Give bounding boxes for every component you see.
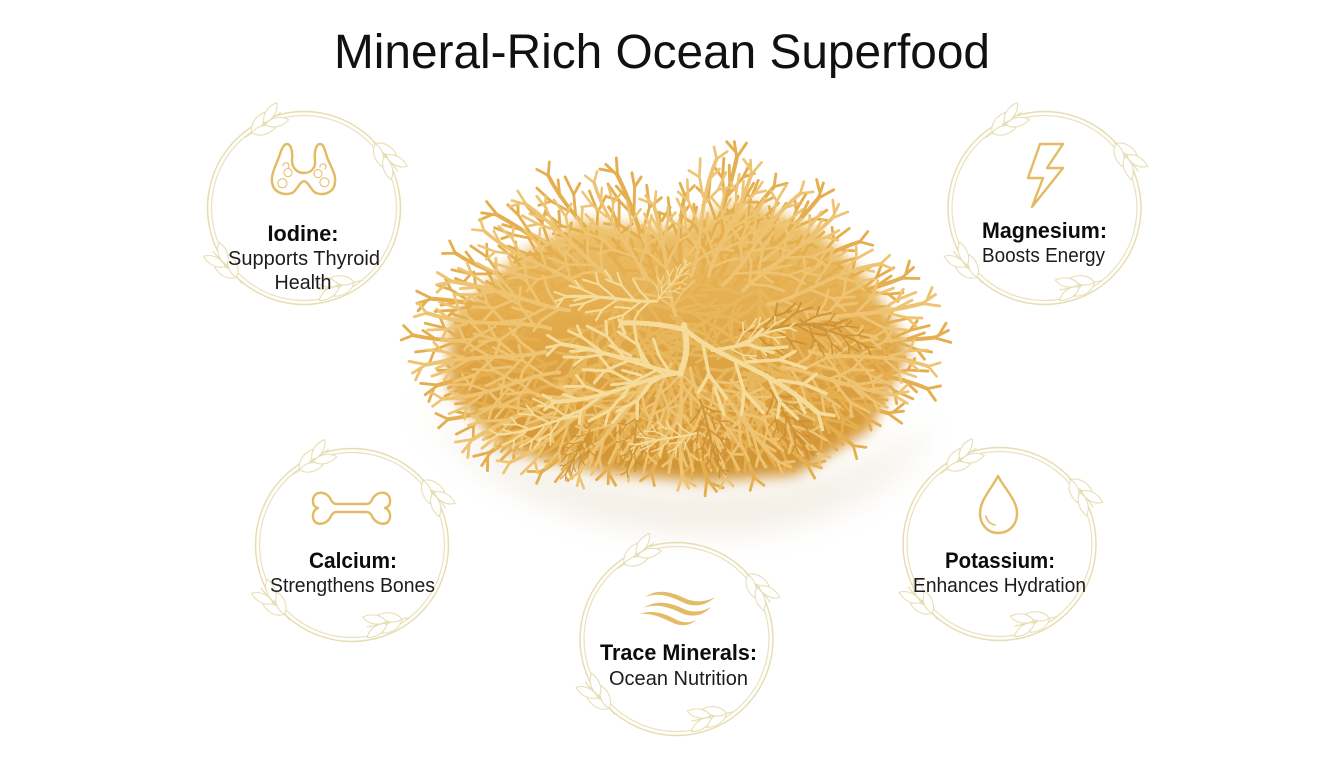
text: strengthens bones: Strengthens Bones: [270, 575, 435, 597]
panel: magnesium: [944, 102, 1148, 304]
icon: water drop: [980, 476, 1017, 533]
icon: thyroid: [272, 144, 335, 194]
wreath: [251, 439, 456, 642]
seaweed fronds: mid layer: [406, 142, 944, 504]
label: trace minerals: Trace Minerals:: [600, 640, 757, 665]
panel: trace minerals: [576, 533, 780, 736]
wreath: [899, 438, 1103, 640]
seaweed ground shadow: [410, 395, 935, 530]
label: calcium: Calcium:: [309, 548, 397, 573]
wreath: [203, 102, 408, 304]
central seaweed illustration: [401, 131, 951, 530]
seaweed fronds: bright front branches: [483, 252, 854, 464]
text: supports thyroid health: [228, 248, 380, 294]
icon: lightning bolt: [1028, 144, 1063, 207]
seaweed fronds: back layer: [401, 131, 951, 507]
text: boosts energy: Boosts Energy: [982, 245, 1105, 267]
panel: potassium: [899, 438, 1103, 640]
icon: ocean waves: [640, 592, 715, 625]
label: magnesium: Magnesium:: [982, 218, 1107, 243]
label: potassium: Potassium:: [945, 548, 1055, 573]
seaweed fronds: inner dark strands: [549, 298, 881, 487]
panel: iodine: [203, 102, 408, 304]
text: supports thyroid health: Supports Thyroid: [228, 248, 380, 270]
icon: bone: [313, 493, 390, 524]
text: enhances hydration: Enhances Hydration: [913, 575, 1086, 597]
panel: calcium: [251, 439, 456, 642]
wreath: [576, 533, 780, 736]
text: supports thyroid health: Health: [274, 272, 332, 294]
seaweed base mass: [448, 200, 910, 482]
text: ocean nutrition: Ocean Nutrition: [609, 668, 748, 690]
label: iodine: Iodine:: [268, 221, 338, 246]
wreath: [944, 102, 1148, 304]
seaweed fronds: cross strands: [529, 256, 874, 468]
title: Mineral-Rich Ocean Superfood: [334, 26, 990, 79]
